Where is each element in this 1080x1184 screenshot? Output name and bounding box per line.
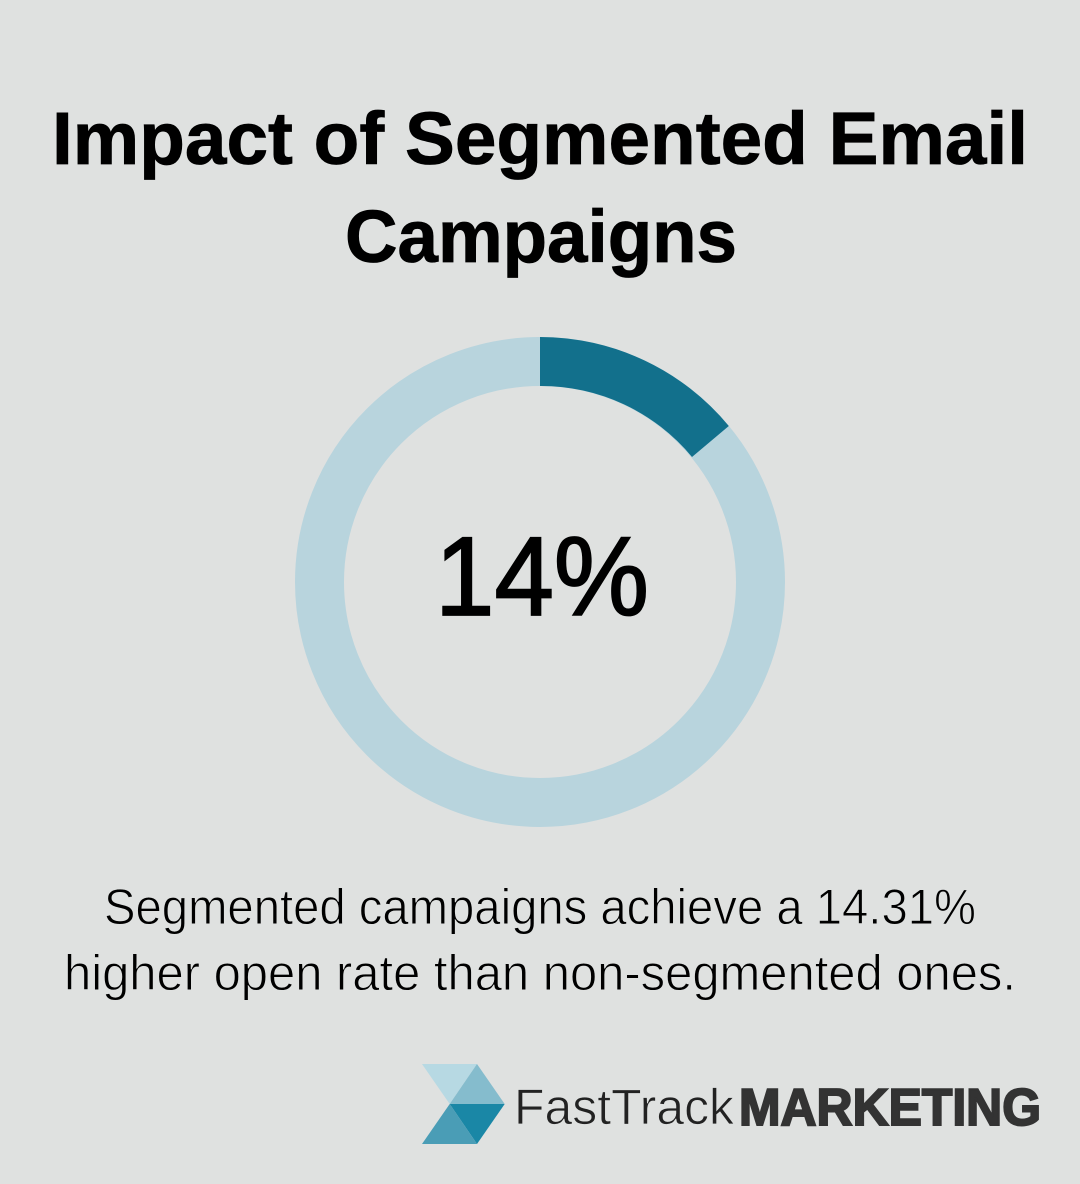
highlighted segment bbox=[540, 337, 729, 457]
logo wordmark: FastTrack bbox=[514, 1079, 735, 1135]
title bbox=[52, 97, 1028, 278]
description text: Segmented campaigns achieve a 14.31% bbox=[104, 879, 976, 935]
logo: FastTrack Marketing bbox=[422, 1064, 1041, 1144]
description text: higher open rate than non-segmented ones. bbox=[64, 945, 1016, 1001]
logo wordmark: MARKETING bbox=[739, 1079, 1041, 1137]
title: Impact of Segmented Email bbox=[52, 97, 1028, 180]
donut value: 14% bbox=[435, 514, 649, 639]
title: Campaigns bbox=[345, 195, 737, 278]
logo wordmark bbox=[514, 1079, 1041, 1137]
description text bbox=[64, 879, 1016, 1001]
logo icon bbox=[422, 1064, 505, 1144]
donut chart: 14% bbox=[320, 337, 760, 802]
